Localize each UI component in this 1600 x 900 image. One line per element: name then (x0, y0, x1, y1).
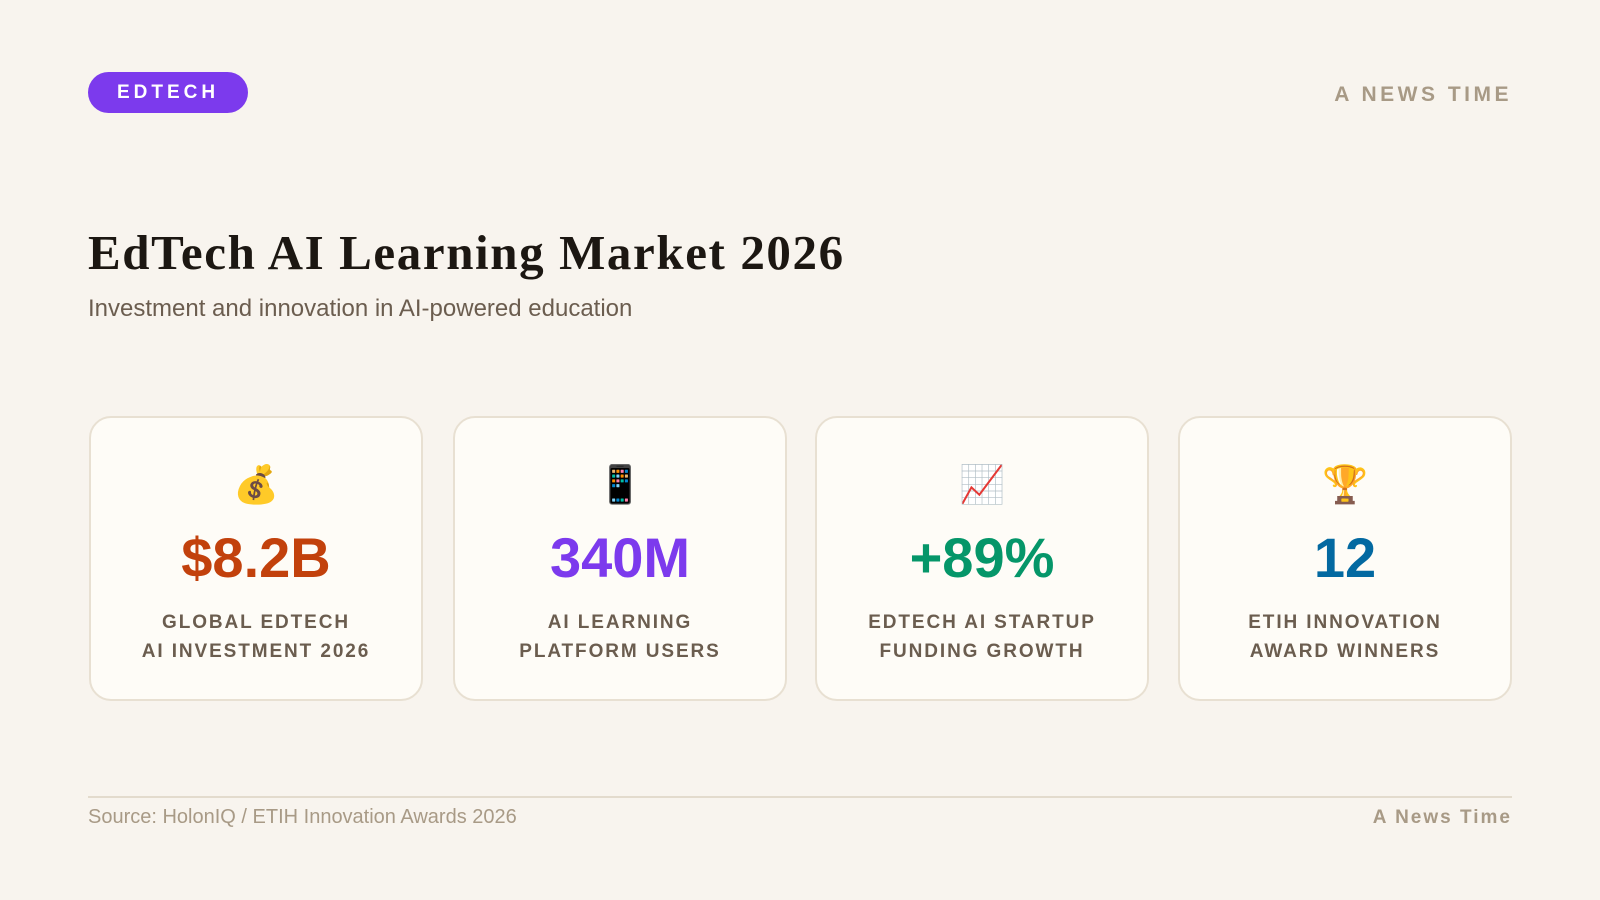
label: AWARD WINNERS (1250, 641, 1440, 662)
label: ETIH INNOVATION (1248, 612, 1442, 633)
value: 340M (550, 526, 690, 589)
footer brand: A News Time (1373, 807, 1512, 828)
icon: chart: 📈 (959, 464, 1005, 507)
card: growth (815, 416, 1149, 701)
title: EdTech AI Learning Market 2026 (88, 225, 845, 280)
label: EDTECH AI STARTUP (868, 612, 1096, 633)
tag pill (88, 72, 248, 113)
value: $8.2B (181, 526, 331, 589)
icon: money bag: 💰 (233, 464, 279, 507)
label (142, 612, 370, 662)
label: FUNDING GROWTH (880, 641, 1084, 662)
label: PLATFORM USERS (519, 641, 721, 662)
value: 12 (1314, 526, 1376, 589)
label: AI LEARNING (548, 612, 692, 633)
label (519, 612, 721, 662)
card: investment (89, 416, 423, 701)
card: awards (1178, 416, 1512, 701)
label (1248, 612, 1442, 662)
icon: trophy: 🏆 (1322, 464, 1368, 507)
tag pill: EDTECH (117, 82, 219, 103)
source: Source: HolonIQ / ETIH Innovation Awards 2026 (88, 806, 517, 828)
card: users (453, 416, 787, 701)
label (868, 612, 1096, 662)
brand header: A NEWS TIME (1334, 83, 1512, 106)
icon: phone: 📱 (597, 464, 643, 507)
label: GLOBAL EDTECH (162, 612, 350, 633)
subtitle: Investment and innovation in AI-powered education (88, 295, 632, 322)
value: +89% (910, 526, 1054, 589)
label: AI INVESTMENT 2026 (142, 641, 370, 662)
